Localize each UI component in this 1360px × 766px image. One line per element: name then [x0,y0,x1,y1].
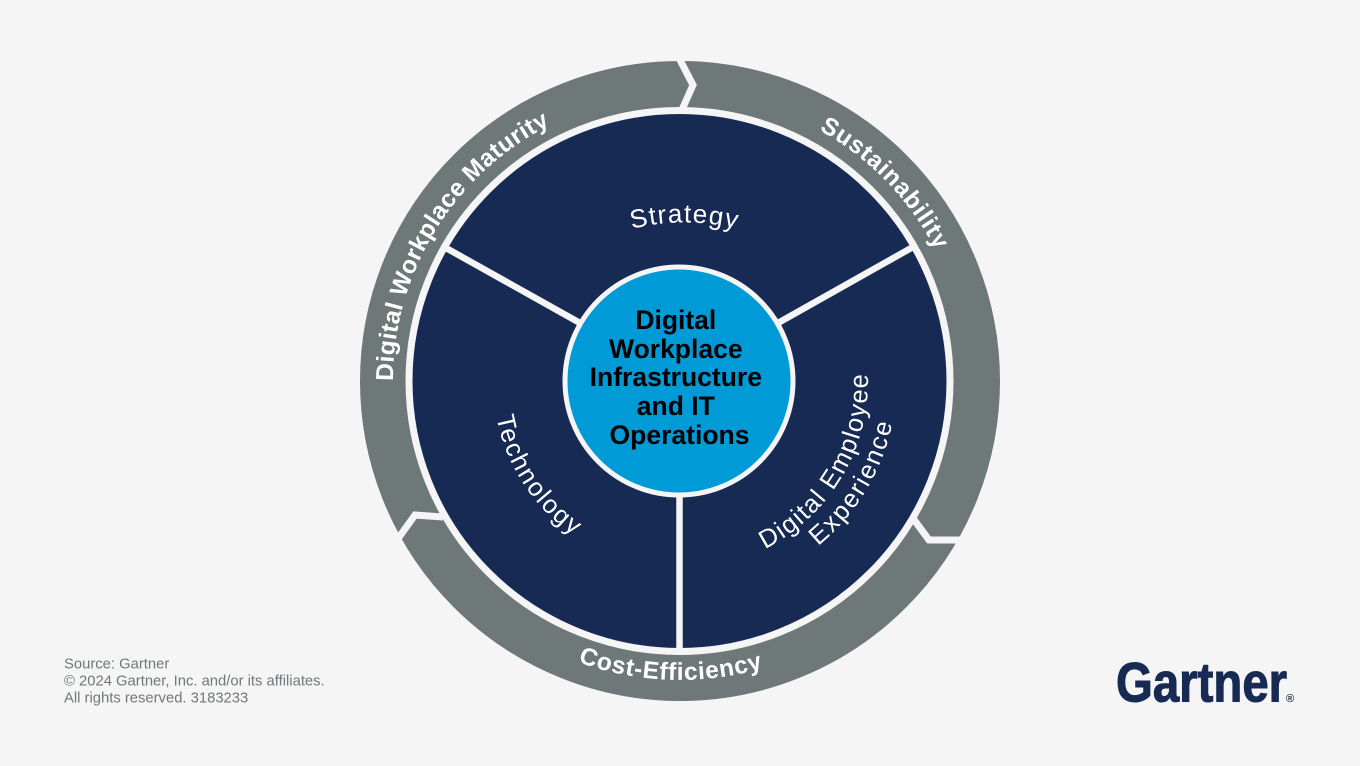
spoke: bottom [676,490,683,652]
source note: All rights reserved. 3183233 [64,690,248,706]
hub title: Operations [610,420,749,450]
source note: Source: Gartner [64,656,169,672]
ring label: Sustainability: Sustainability [822,118,947,246]
sector label: Technology: Technology [498,413,582,534]
chevron divider: lower left [397,515,443,540]
sector label: Strategy: Strategy [630,206,739,232]
line 1: Digital Employee [758,375,870,548]
hub title: and IT [637,391,715,421]
spoke: right [778,247,913,323]
sector label: Digital Employee Experience [758,375,892,548]
line 2: Experience [808,422,892,545]
ring label: Digital Workplace Maturity: Digital Workplace Maturity [376,114,546,380]
chevron divider: top [679,58,693,112]
wordmark: Gartner [1116,651,1287,713]
navy wheel with three sectors [409,110,950,652]
hub circle [565,267,793,495]
wheel disc [409,110,950,652]
hub title: Infrastructure [590,362,762,392]
chevron divider: lower right [912,517,966,540]
source note: © 2024 Gartner, Inc. and/or its affiliates. [64,674,325,690]
Gartner logo [1116,651,1294,713]
spoke: left [446,248,580,323]
registered mark: ® [1286,693,1294,705]
ring label: Cost-Efficiency: Cost-Efficiency [580,648,760,680]
hub title: Digital [635,305,716,335]
ring band [384,84,976,678]
hub title: Workplace [609,334,743,364]
outer ring with three chevron segments [384,58,976,678]
